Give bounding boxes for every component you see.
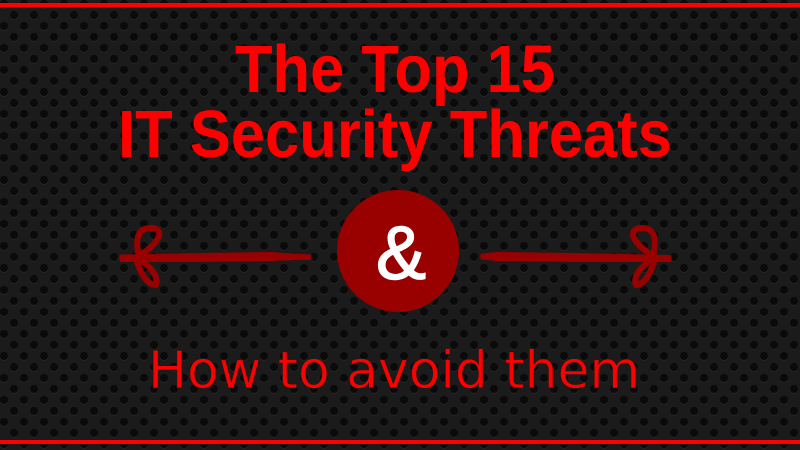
right arrow [482,228,670,285]
title [118,32,672,172]
center circle with ampersand: & [376,211,426,295]
center circle with ampersand [337,190,459,312]
title: IT Security Threats [118,97,672,172]
left arrow [121,228,310,285]
subtitle: How to avoid them [148,341,640,401]
title: The Top 15 [235,32,555,107]
